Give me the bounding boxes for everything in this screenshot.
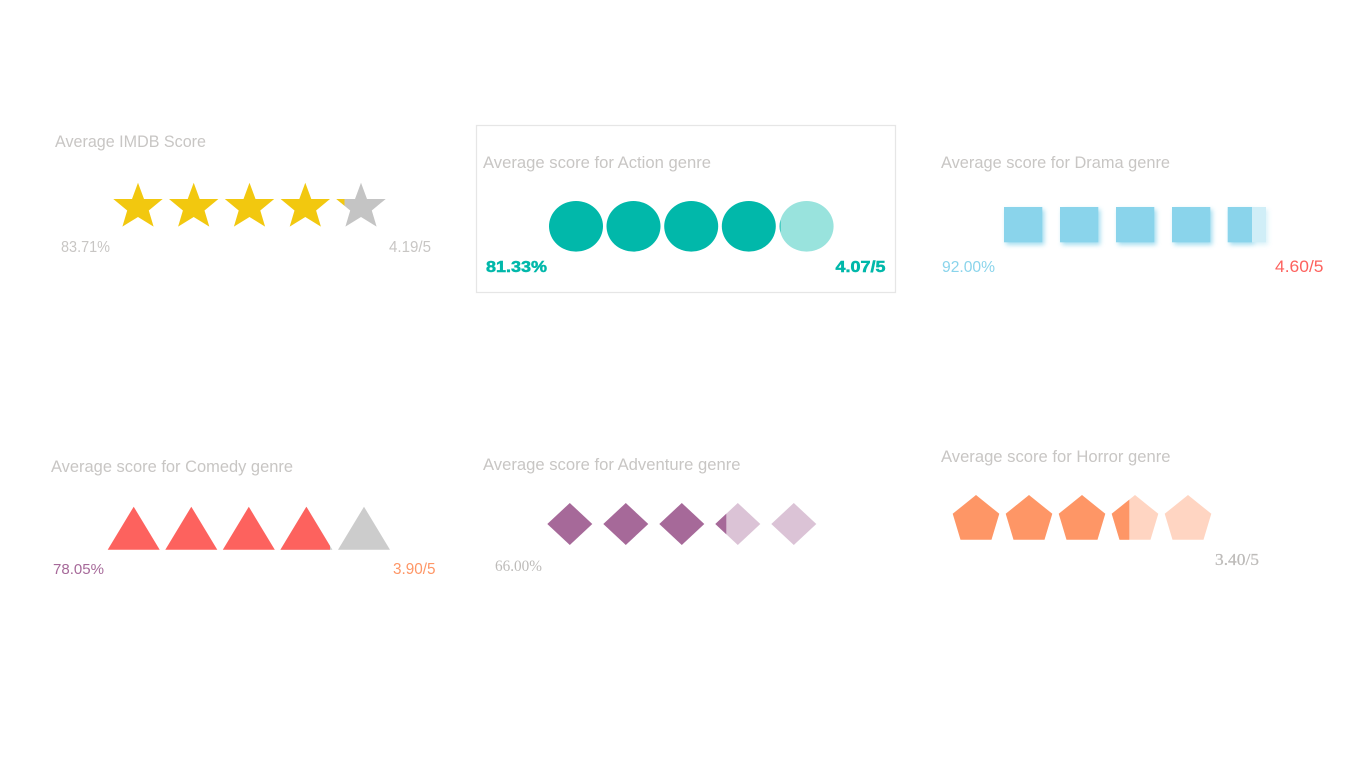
heading: comedy: Average score for Comedy genre [51, 458, 293, 476]
label: rating: 3.40/5 [1215, 550, 1259, 569]
panel: adventure genre [483, 456, 816, 575]
heading: horror: Average score for Horror genre [941, 448, 1170, 466]
label: percent: 83.71% [61, 239, 110, 256]
panel: average IMDB score [55, 133, 431, 256]
icon row: diamonds [547, 503, 816, 545]
icon row: pentagons [953, 495, 1211, 540]
label: percent: 81.33% [486, 259, 547, 276]
heading: IMDB: Average IMDB Score [55, 133, 206, 151]
icon row: triangles [108, 507, 390, 550]
panel: comedy genre [51, 458, 436, 578]
icon row: squares [1004, 207, 1268, 245]
panel: drama genre [941, 154, 1324, 276]
label: rating: 4.19/5 [389, 239, 431, 256]
label: rating: 4.07/5 [836, 259, 886, 276]
icon row: circles [549, 201, 834, 252]
heading: action: Average score for Action genre [483, 154, 711, 172]
panel border [476, 126, 896, 292]
label: rating: 3.90/5 [393, 561, 436, 578]
label: rating: 4.60/5 [1275, 258, 1324, 276]
heading: drama: Average score for Drama genre [941, 154, 1170, 172]
panel: action genre [476, 126, 896, 292]
icon row: stars [113, 183, 386, 227]
label: percent: 66.00% [495, 558, 542, 575]
heading: adventure: Average score for Adventure genre [483, 456, 740, 474]
label: percent: 78.05% [53, 561, 104, 578]
label: percent: 92.00% [942, 259, 995, 276]
panel: horror genre [941, 448, 1259, 569]
